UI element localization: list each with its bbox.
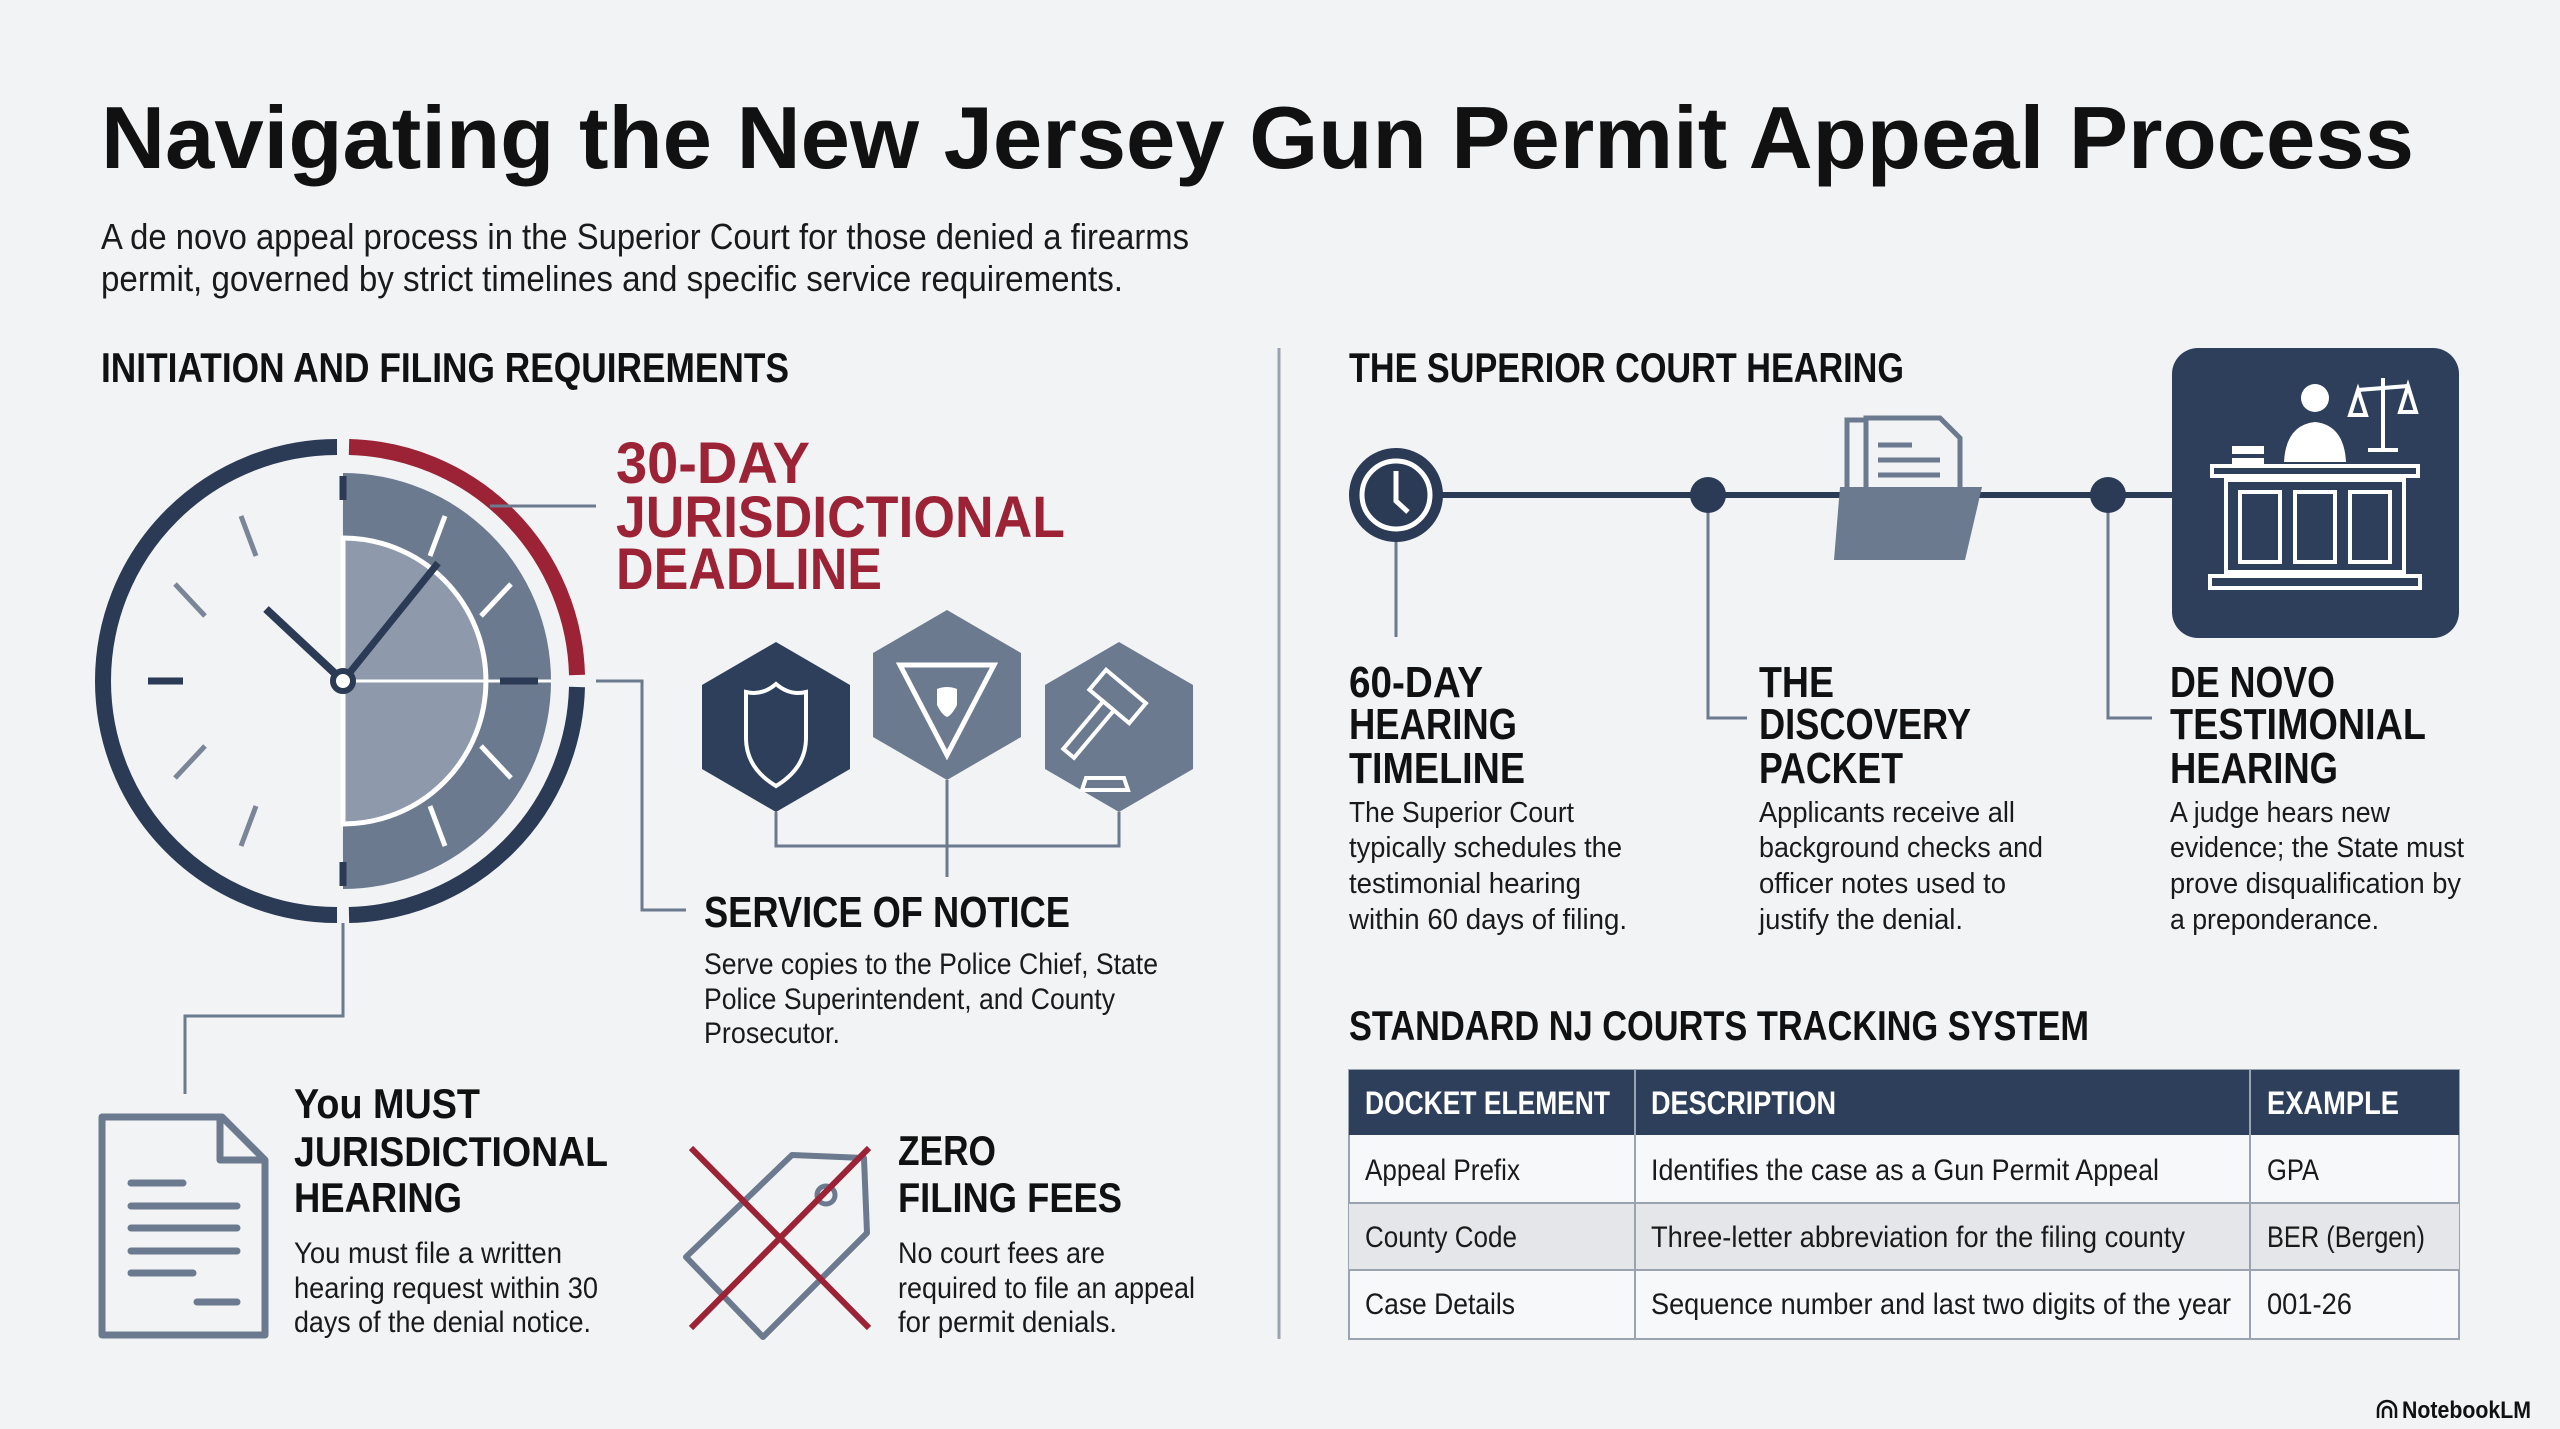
column: de novo testimonial hearing [2170,658,2464,936]
table: docket elements: Sequence number and last two digits of the year [1651,1288,2231,1321]
table: docket elements: County Code [1365,1221,1517,1254]
table: docket elements: Three-letter abbreviation for the filing county [1651,1221,2185,1254]
service of notice: Police Superintendent, and County [704,983,1115,1016]
subtitle [101,216,1189,299]
column: 60-day hearing timeline: The Superior Court [1349,797,1574,829]
subtitle: permit, governed by strict timelines and specific service requirements. [101,258,1123,299]
table: docket elements: Case Details [1365,1288,1515,1321]
table: docket elements: Appeal Prefix [1365,1154,1520,1187]
column: de novo testimonial hearing: DE NOVO [2170,658,2335,707]
heading: tracking system: STANDARD NJ COURTS TRACKING SYSTEM [1349,1002,2089,1049]
service of notice [704,888,1158,1050]
deadline heading [616,431,1065,602]
table: docket elements: 001-26 [2267,1288,2352,1321]
table: docket elements: GPA [2267,1154,2319,1187]
column: 60-day hearing timeline: HEARING [1349,700,1517,749]
hearing request text: HEARING [294,1174,462,1221]
zero filing fees text: for permit denials. [898,1306,1117,1339]
zero filing fees text: No court fees are [898,1237,1105,1270]
service of notice: Serve copies to the Police Chief, State [704,948,1158,981]
column: the discovery packet [1758,658,2043,936]
heading: the superior court hearing: THE SUPERIOR COURT HEARING [1349,344,1904,391]
table: docket elements: DESCRIPTION [1651,1085,1836,1121]
column: de novo testimonial hearing: evidence; the State must [2170,832,2464,864]
connector: clock to deadline [490,504,596,508]
icon: gavel hexagon [1045,642,1193,812]
connector: clock to hearing request [185,923,343,1094]
table: docket elements: BER (Bergen) [2267,1221,2425,1254]
column: de novo testimonial hearing: TESTIMONIAL [2170,700,2426,749]
column: de novo testimonial hearing: HEARING [2170,744,2338,793]
zero filing fees text [898,1127,1195,1339]
hearing request text [294,1080,608,1339]
deadline heading: 30-DAY [616,431,810,496]
column: de novo testimonial hearing: a preponderance. [2170,904,2379,936]
heading: initiation and filing requirements: INITIATION AND FILING REQUIREMENTS [101,344,789,391]
subtitle: A de novo appeal process in the Superior Court for those denied a firearms [101,216,1189,257]
icon: police shield hexagon [702,642,850,812]
icon: state police hexagon [873,610,1021,780]
table: docket elements: DOCKET ELEMENT [1365,1085,1610,1121]
column: 60-day hearing timeline: typically schedules the [1349,832,1622,864]
column: the discovery packet: justify the denial. [1758,904,1963,936]
deadline heading: JURISDICTIONAL [616,485,1065,550]
service of notice: Prosecutor. [704,1017,840,1050]
hearing request text: days of the denial notice. [294,1306,591,1339]
timeline [1349,348,2459,718]
zero filing fees text: required to file an appeal [898,1272,1195,1305]
deadline heading: DEADLINE [616,537,882,602]
icon: clock [103,447,577,915]
column: the discovery packet: THE [1759,658,1834,707]
connector: clock to service of notice [596,681,686,910]
column: the discovery packet: background checks and [1759,832,2043,864]
hearing request text: You MUST [294,1080,480,1127]
hearing request text: hearing request within 30 [294,1272,598,1305]
logo: NotebookLM: NotebookLM [2402,1397,2531,1424]
column: de novo testimonial hearing: prove disqualification by [2170,868,2461,900]
service of notice: SERVICE OF NOTICE [704,888,1070,937]
icon: courthouse box [2172,348,2459,638]
table: docket elements: EXAMPLE [2267,1085,2399,1121]
column: 60-day hearing timeline [1348,658,1627,936]
hearing request text: JURISDICTIONAL [294,1128,608,1175]
icon: document [102,1117,265,1335]
table: docket elements: Identifies the case as a Gun Permit Appeal [1651,1154,2159,1187]
column: 60-day hearing timeline: within 60 days of filing. [1348,904,1627,936]
column: the discovery packet: DISCOVERY [1759,700,1971,749]
icon: timeline clock [1349,448,1443,542]
column: de novo testimonial hearing: A judge hears new [2170,797,2391,829]
column: 60-day hearing timeline: testimonial hearing [1349,868,1581,900]
column: the discovery packet: Applicants receive all [1759,797,2015,829]
zero filing fees text: ZERO [898,1127,996,1174]
column: 60-day hearing timeline: TIMELINE [1349,744,1525,793]
hearing request text: You must file a written [294,1237,562,1270]
icon: crossed-out price tag [686,1148,869,1337]
icon: folder [1834,418,1982,560]
column: the discovery packet: PACKET [1759,744,1903,793]
table: docket elements [1349,1070,2459,1339]
column: the discovery packet: officer notes used to [1759,868,2006,900]
title: Navigating the New Jersey Gun Permit Appeal Process [101,88,2414,187]
zero filing fees text: FILING FEES [898,1174,1122,1221]
icons: service hexagons [702,610,1193,877]
column: 60-day hearing timeline: 60-DAY [1349,658,1483,707]
